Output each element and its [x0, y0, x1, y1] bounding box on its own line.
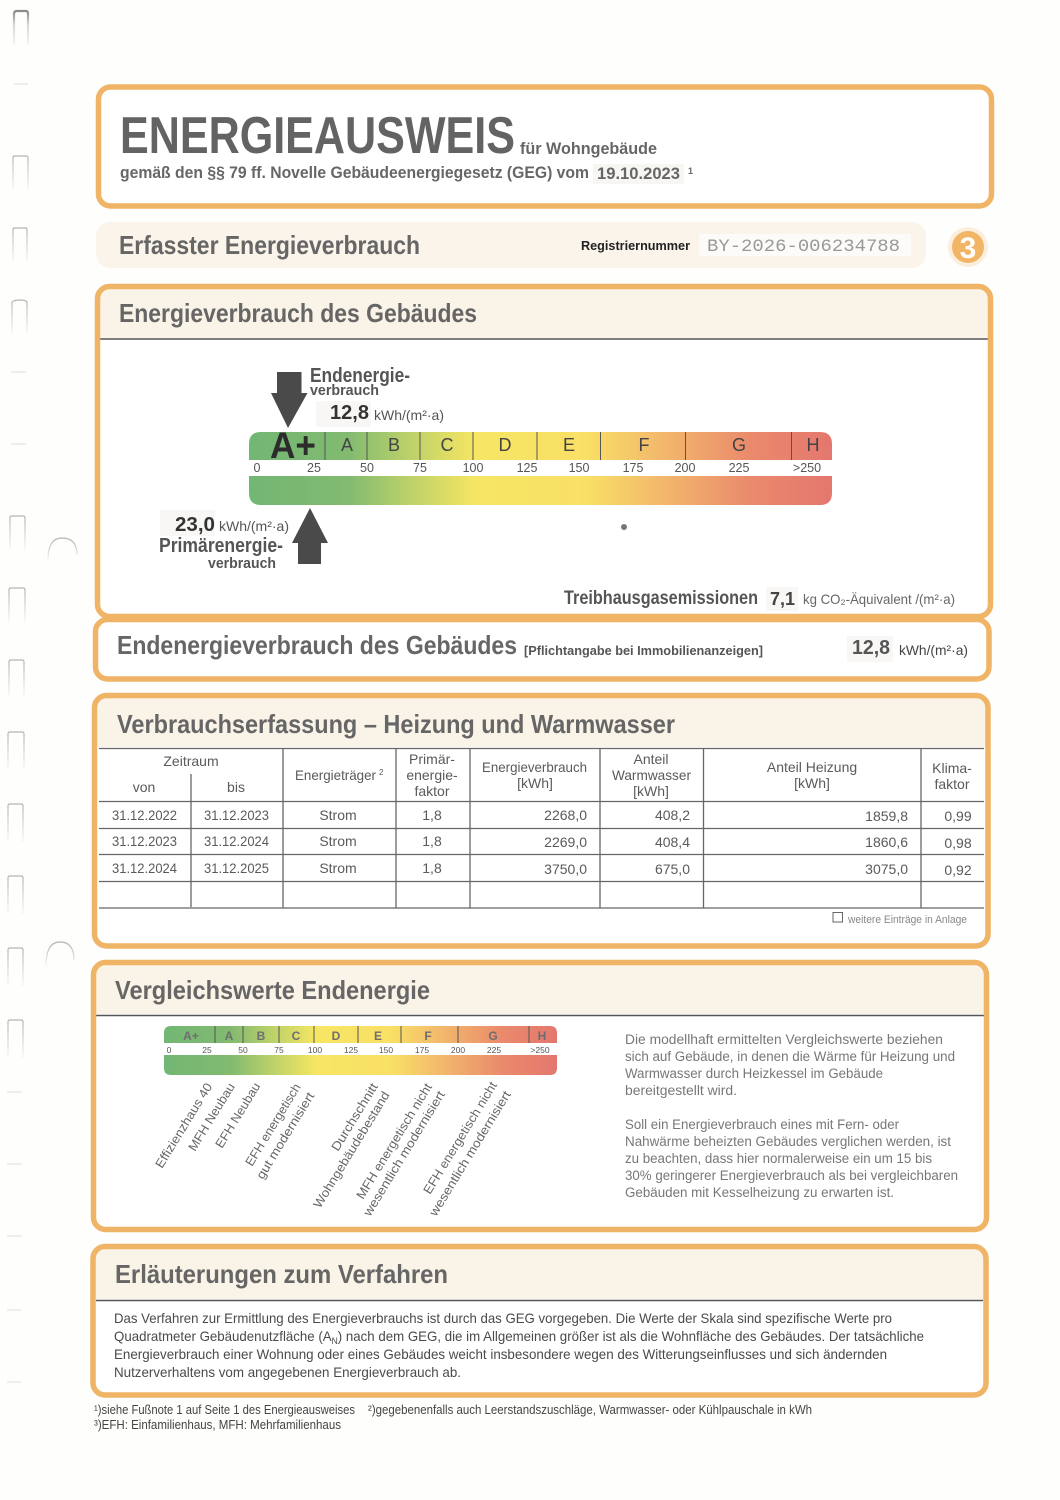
row 2023 [112, 807, 972, 824]
rotated benchmark labels: Effizienzhaus 40 [153, 1081, 215, 1171]
greenhouse gas emissions: kg CO₂-Äquivalent /(m²·a) [803, 591, 955, 607]
mandatory note: [Pflichtangabe bei Immobilienanzeigen] [524, 643, 763, 658]
table header: von [133, 779, 155, 795]
panel heading: Vergleichswerte Endenergie [115, 975, 430, 1005]
label: Primärenergieverbrauch: Primärenergie- [159, 535, 283, 557]
energy class scale: 125 [517, 461, 537, 475]
row 2023: 0,99 [944, 808, 972, 824]
value: primary energy: 23,0 [175, 514, 215, 536]
panel: Erläuterungen zum Verfahren [93, 1246, 986, 1395]
panel heading: Erläuterungen zum Verfahren [115, 1259, 448, 1289]
row 2023: 1,8 [422, 807, 442, 823]
table header: Primär- [409, 751, 455, 767]
row 2025 [112, 860, 972, 878]
arrow: primary energy [292, 508, 328, 564]
rotated benchmark labels: EFH Neubau [213, 1080, 263, 1151]
panel: Endenergieverbrauch callout [96, 620, 989, 679]
table header: [kWh] [517, 775, 553, 791]
arrow: final energy [271, 372, 308, 428]
rotated benchmark labels: Wohngebäudebestand [311, 1089, 393, 1211]
page number badge: 3 [960, 232, 976, 265]
table header: [kWh] [794, 775, 830, 791]
value: kWh/(m²·a) [899, 642, 968, 658]
energy class scale: D [498, 435, 512, 455]
table header: [kWh] [633, 783, 669, 799]
value: final energy: kWh/(m²·a) [374, 407, 444, 423]
row 2025: 3075,0 [865, 861, 908, 877]
table header: faktor [934, 776, 970, 792]
comparison scale: >250 [530, 1045, 550, 1055]
energy class scale: 75 [413, 461, 427, 475]
row 2024: 408,4 [655, 834, 690, 850]
row 2023: 2268,0 [544, 807, 587, 823]
energy class scale: 175 [623, 461, 643, 475]
row 2023: 31.12.2022 [112, 807, 177, 823]
comparison scale: E [374, 1029, 382, 1043]
table header: energie- [406, 767, 458, 783]
row 2025: 3750,0 [544, 861, 587, 877]
comparison scale: 200 [451, 1045, 465, 1055]
checkbox: further entries: weitere Einträge in Anlage [847, 914, 967, 926]
panel: Verbrauchserfassung [94, 696, 988, 946]
energy class scale: 225 [729, 461, 749, 475]
value: final energy [316, 401, 444, 427]
comparison scale: 150 [379, 1045, 393, 1055]
comparison scale: 25 [202, 1045, 212, 1055]
table header: bis [227, 779, 245, 795]
explanatory text: bereitgestellt wird. [625, 1083, 737, 1098]
explanatory text: sich auf Gebäude, in denen die Wärme für Heizung und [625, 1049, 955, 1064]
comparison scale: 0 [167, 1045, 172, 1055]
energy class scale [249, 432, 832, 505]
row 2025: 675,0 [655, 861, 690, 877]
section bar: Erfasster Energieverbrauch [96, 222, 926, 268]
footnote marker: 1 [688, 166, 693, 176]
page number badge [948, 227, 988, 267]
rotated benchmark labels: EFH energetisch [243, 1081, 304, 1169]
explanation text: Nutzerverhaltens vom angegebenen Energieverbrauch ab. [114, 1364, 461, 1380]
explanation text: N [332, 1336, 338, 1346]
subheading: für Wohngebäude: für Wohngebäude [520, 139, 657, 158]
comparison scale: B [257, 1029, 266, 1043]
row 2024: 31.12.2024 [204, 833, 269, 849]
comparison scale: 75 [274, 1045, 284, 1055]
row 2024: 0,98 [944, 835, 972, 851]
rotated benchmark labels: MFH energetisch nicht [354, 1080, 435, 1202]
row 2024: 31.12.2023 [112, 833, 177, 849]
row 2023: 408,2 [655, 807, 690, 823]
value: 12,8 [852, 637, 890, 659]
energy class scale: B [388, 435, 400, 455]
value: primary energy [160, 510, 289, 536]
table header: Anteil Heizung [767, 759, 857, 775]
label: Endenergieverbrauch [310, 365, 410, 399]
value: primary energy: kWh/(m²·a) [219, 518, 289, 534]
energy class scale: >250 [793, 461, 821, 475]
comparison scale: F [424, 1029, 432, 1043]
table header: Anteil [633, 751, 669, 767]
explanation text: Das Verfahren zur Ermittlung des Energieverbrauchs ist durch das GEG vorgegeben. Die Werte der Skala sind spezifische Werte pro [114, 1310, 892, 1326]
table header: 2 [379, 768, 384, 777]
section heading: Erfasster Energieverbrauch [119, 230, 420, 260]
footnotes: ²)gegebenenfalls auch Leerstandszuschläge, Warmwasser- oder Kühlpauschale in kWh [368, 1403, 812, 1417]
energy class scale: G [732, 435, 746, 455]
row 2024: 1860,6 [865, 834, 908, 850]
rotated benchmark labels: wesentlich modernisiert [360, 1088, 448, 1220]
comparison scale: D [332, 1029, 341, 1043]
explanatory text: Nahwärme beheizten Gebäudes verglichen werden, ist [625, 1134, 951, 1149]
row 2025: 1,8 [422, 860, 442, 876]
energy class scale: C [440, 435, 454, 455]
row 2024: Strom [319, 833, 357, 849]
footnotes [94, 1403, 812, 1432]
rotated benchmark labels: gut modernisiert [254, 1089, 318, 1182]
comparison scale: G [488, 1029, 498, 1043]
explanatory text: Die modellhaft ermittelten Vergleichswerte beziehen [625, 1032, 943, 1047]
registration number: BY-2026-006234788 [707, 237, 900, 257]
greenhouse gas emissions: 7,1 [770, 589, 795, 609]
scan speck [621, 524, 627, 530]
comparison scale: 225 [487, 1045, 501, 1055]
row 2024 [112, 833, 972, 851]
table header: Energieverbrauch [482, 759, 587, 775]
energy class result A+: A+ [270, 425, 316, 466]
explanation text: Quadratmeter Gebäudenutzfläche (A [114, 1328, 344, 1344]
row 2023: 1859,8 [865, 808, 908, 824]
registration label: Registriernummer [581, 238, 690, 253]
explanatory text: 30% geringerer Energieverbrauch als bei vergleichbaren [625, 1168, 958, 1183]
panel heading: Endenergieverbrauch des Gebäudes [117, 630, 517, 660]
energy class scale: 150 [569, 461, 589, 475]
explanation text: Energieverbrauch einer Wohnung oder eines Gebäudes weicht insbesondere wegen des Witterungseinflusses und sich ändernden [114, 1346, 887, 1362]
row 2025: 31.12.2024 [112, 860, 177, 876]
label: Endenergieverbrauch: verbrauch [310, 382, 379, 399]
punch hole marks [7, 11, 77, 1382]
comparison scale: C [292, 1029, 301, 1043]
table header: Klima- [932, 760, 972, 776]
panel: Vergleichswerte Endenergie [94, 962, 986, 1230]
energy class scale: 100 [463, 461, 483, 475]
comparison scale: 100 [308, 1045, 322, 1055]
label: Primärenergieverbrauch [159, 535, 283, 572]
row 2023: 31.12.2023 [204, 807, 269, 823]
panel: title [98, 87, 992, 206]
panel: Energieverbrauch des Gebäudes [98, 286, 990, 616]
row 2025: Strom [319, 860, 357, 876]
explanatory text: Warmwasser durch Heizkessel im Gebäude [625, 1066, 883, 1081]
footnotes: ³)EFH: Einfamilienhaus, MFH: Mehrfamilienhaus [94, 1418, 341, 1432]
row 2025: 31.12.2025 [204, 860, 269, 876]
energy class scale: E [563, 435, 575, 455]
label: Endenergieverbrauch: Endenergie- [310, 365, 410, 387]
value: final energy: 12,8 [330, 402, 369, 424]
energy class scale: 50 [360, 461, 374, 475]
table header: Energieträger [295, 767, 376, 783]
comparison scale: H [538, 1029, 546, 1043]
energy class scale: 200 [675, 461, 695, 475]
table header: Warmwasser [612, 767, 691, 783]
comparison scale [164, 1026, 557, 1075]
consumption table [99, 748, 984, 908]
row 2025: 0,92 [944, 862, 972, 878]
label: Primärenergieverbrauch: verbrauch [208, 555, 276, 572]
energy class scale: A [341, 435, 353, 455]
comparison scale: 50 [238, 1045, 248, 1055]
rotated benchmark labels [153, 1079, 514, 1220]
energy class scale: 0 [254, 461, 261, 475]
rotated benchmark labels: MFH Neubau [186, 1081, 238, 1154]
rotated benchmark labels: EFH energetisch nicht [421, 1079, 500, 1197]
comparison scale: A+ [183, 1029, 199, 1043]
greenhouse gas emissions: Treibhausgasemissionen [564, 588, 758, 609]
panel heading: Energieverbrauch des Gebäudes [119, 298, 477, 328]
energy class scale: H [806, 435, 820, 455]
explanatory text [625, 1032, 958, 1200]
rotated benchmark labels: wesentlich modernisiert [426, 1088, 514, 1220]
table header: Zeitraum [163, 753, 219, 769]
rotated benchmark labels: Durchschnitt [329, 1080, 381, 1154]
comparison scale: 175 [415, 1045, 429, 1055]
explanation text: ) nach dem GEG, die im Allgemeinen größer ist als die Wohnfläche des Gebäudes. Der tatsächliche [338, 1328, 924, 1344]
explanatory text: zu beachten, dass hier normalerweise ein um 15 bis [625, 1151, 932, 1166]
explanatory text: Soll ein Energieverbrauch eines mit Fern- oder [625, 1117, 899, 1132]
date field: 19.10.2023 [597, 165, 680, 183]
comparison scale: A [225, 1029, 234, 1043]
energy class scale: 25 [307, 461, 321, 475]
table header [133, 751, 972, 799]
footnotes: ¹)siehe Fußnote 1 auf Seite 1 des Energieausweises [94, 1403, 355, 1417]
row 2024: 2269,0 [544, 834, 587, 850]
legal basis line: gemäß den §§ 79 ff. Novelle Gebäudeenergiegesetz (GEG) vom [120, 164, 589, 182]
explanatory text: Gebäuden mit Kesselheizung zu erwarten ist. [625, 1185, 894, 1200]
panel heading: Verbrauchserfassung – Heizung und Warmwasser [117, 709, 675, 739]
explanation text [114, 1310, 924, 1380]
value [847, 636, 968, 662]
greenhouse gas emissions [564, 587, 955, 611]
energy class scale: F [638, 435, 650, 455]
row 2024: 1,8 [422, 833, 442, 849]
row 2023: Strom [319, 807, 357, 823]
table header: faktor [414, 783, 450, 799]
comparison scale: 125 [344, 1045, 358, 1055]
heading: Energieausweis: ENERGIEAUSWEIS [120, 107, 515, 165]
